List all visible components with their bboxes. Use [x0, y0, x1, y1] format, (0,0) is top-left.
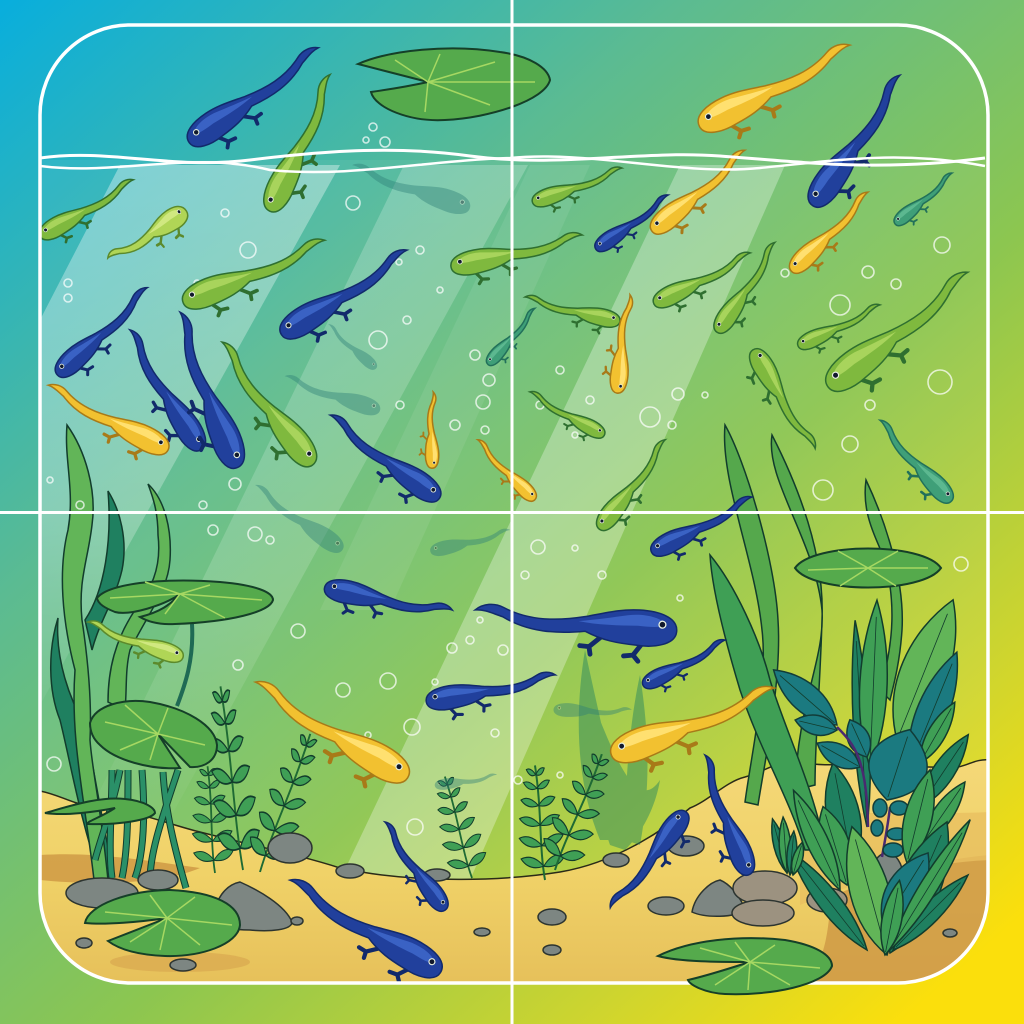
- tadpole: blue top left: [186, 46, 321, 150]
- ochre sand bands: [40, 854, 990, 985]
- tall seaweed right: [710, 425, 902, 850]
- tadpole: green centre: [450, 232, 585, 286]
- lily pad: top floating: [358, 48, 550, 120]
- ghost tadpole left mid: [285, 375, 380, 416]
- tadpole: blue on rocks: [685, 751, 759, 882]
- ghost tadpole lower left: [255, 484, 344, 553]
- tadpole: teal right: [893, 172, 954, 226]
- tadpole: pale green stub: [106, 206, 188, 260]
- tadpole: blue on sand centre: [370, 817, 453, 920]
- lily pad: right upper: [795, 548, 941, 588]
- ghost tadpole bottom centre: [434, 774, 497, 790]
- right broad-leaf plant cluster: [764, 591, 978, 962]
- small grass right: [771, 815, 804, 876]
- sprig plant centre right: [518, 754, 610, 880]
- tadpole: blue upper mid right: [594, 194, 671, 253]
- tadpole: yellow vertical: [601, 293, 639, 394]
- tadpole: green mid: [202, 334, 323, 480]
- tadpole: green right 1: [650, 244, 759, 320]
- ghost tadpole mid: [328, 324, 378, 370]
- tadpole: yellow lower right: [606, 674, 786, 783]
- tadpole: faint green centre right: [523, 385, 608, 448]
- tadpole: blue pair rear: [110, 324, 211, 462]
- tadpole: blue mid: [316, 406, 446, 517]
- ghost tadpole among plants: [554, 703, 632, 717]
- bubbles: [47, 123, 968, 835]
- tadpole: large green right: [818, 260, 987, 411]
- tadpoles: faint distant silhouettes: [244, 155, 632, 796]
- tadpole: yellow at centre: [468, 435, 540, 509]
- lily pad: left mid: [90, 701, 217, 768]
- tadpole: blue centre: [279, 249, 410, 343]
- tadpole: yellow top right: [697, 44, 852, 140]
- tadpole: blue top right: [807, 74, 902, 208]
- tadpole: small yellow: [419, 392, 440, 468]
- light rays: [40, 165, 785, 880]
- tadpole: green among lily pads: [82, 614, 186, 674]
- left tall seaweed: [51, 425, 186, 888]
- background ghost plants: [579, 650, 660, 850]
- tadpole: large blue lower centre: [471, 592, 679, 665]
- lily pad: bottom left: [85, 890, 240, 956]
- tadpole: green lower centre right: [592, 434, 680, 540]
- lily pad: left upper: [97, 581, 273, 624]
- ghost tadpole top: [352, 164, 470, 214]
- lily pad: left narrow: [45, 798, 155, 824]
- tadpole: green right of centre: [521, 289, 622, 338]
- tadpole: blue left: [50, 280, 162, 390]
- tadpole: blue lower left: [321, 577, 454, 631]
- tadpole: green left centre: [182, 238, 328, 318]
- tadpole: yellow left: [37, 375, 174, 470]
- horizontal crosshair line: [0, 511, 1024, 514]
- tadpole: green upper mid right: [531, 166, 624, 213]
- tadpole: green head up: [737, 344, 824, 459]
- sand floor: [40, 760, 990, 985]
- tadpole: blue lower right small: [647, 488, 761, 569]
- rocks left: [66, 833, 490, 971]
- tadpole: blue lower centre: [424, 664, 560, 724]
- tadpole: teal centre: [483, 304, 544, 372]
- water surface: [40, 150, 985, 172]
- lily pad: bottom right overlapping frame: [658, 938, 832, 994]
- lily pad stem lines: [177, 624, 192, 706]
- tadpole: green right 2: [709, 237, 790, 342]
- tadpole: blue on sand left: [275, 867, 449, 997]
- tadpole: green at surface: [263, 73, 332, 213]
- tadpole: yellow right: [788, 191, 870, 274]
- sprig plant centre: [436, 776, 486, 878]
- ghost tadpole lower centre: [430, 528, 510, 556]
- tadpole: green right 3: [795, 298, 887, 360]
- tadpole: yellow upper mid right: [650, 150, 748, 235]
- tadpole: teal far right: [867, 414, 958, 513]
- tadpole: blue teal on sand: [602, 805, 702, 920]
- water tint: [42, 160, 986, 878]
- tadpole: green far left: [42, 178, 136, 244]
- vertical crosshair line: [510, 0, 514, 1024]
- rocks right: [538, 836, 957, 955]
- tadpole: small blue lower right: [639, 633, 733, 699]
- sprig plants left: [192, 686, 318, 874]
- tadpole: yellow lower left: [240, 669, 416, 803]
- tadpole: blue pair front: [154, 307, 250, 477]
